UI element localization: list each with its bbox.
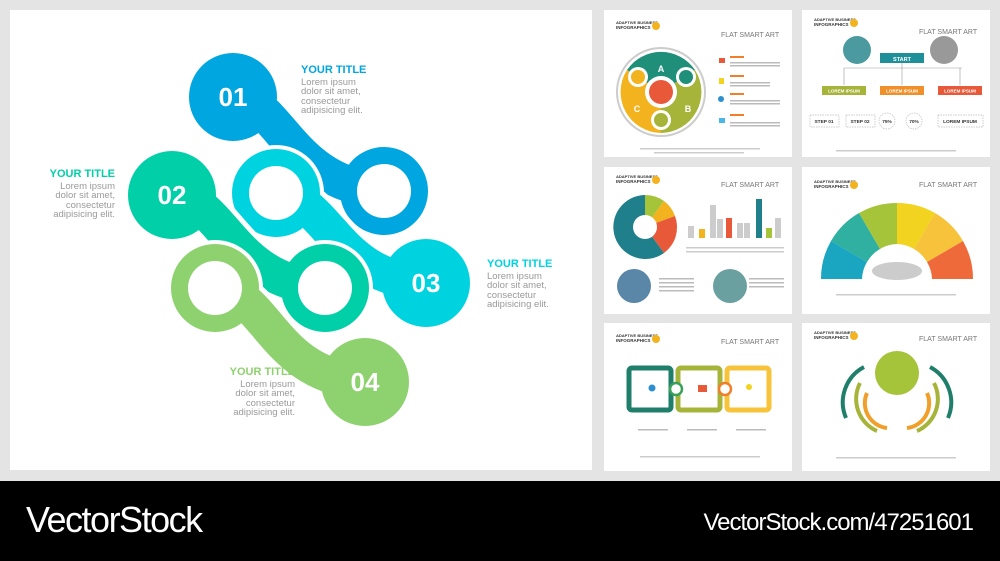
thumbnail 3: pie and bars: FLAT SMART ART xyxy=(721,182,780,189)
url text: VectorStock.com/47251601 xyxy=(703,509,973,536)
piece 02 teal xyxy=(124,147,373,336)
thumbnail 4: semicircle: INFOGRAPHICS xyxy=(814,184,849,189)
thumbnail 2: flowchart: ADAPTIVE BUSINESS xyxy=(814,17,856,22)
thumbnail 2: flowchart: STEP 01 xyxy=(814,119,834,125)
thumbnail 1: circle diagram: FLAT SMART ART xyxy=(721,32,780,39)
text 04: consectetur xyxy=(246,398,295,409)
text 01: consectetur xyxy=(301,96,350,107)
text 01: dolor sit amet, xyxy=(301,86,361,97)
text 03: dolor sit amet, xyxy=(487,280,547,291)
piece 02 teal: 02 xyxy=(158,180,186,210)
text 01: adipisicing elit. xyxy=(301,105,363,116)
text 01: Lorem ipsum xyxy=(301,77,356,88)
thumbnail 4: semicircle: FLAT SMART ART xyxy=(919,182,978,189)
thumbnail 2: flowchart: LOREM IPSUM xyxy=(943,119,977,125)
thumbnail 5: puzzle: ADAPTIVE BUSINESS xyxy=(616,333,658,338)
text 03 xyxy=(487,258,552,310)
thumbnail 5: puzzle: INFOGRAPHICS xyxy=(616,338,651,343)
thumbnail 1: circle diagram: A xyxy=(658,64,665,74)
thumbnail 4: semicircle xyxy=(802,167,990,314)
piece 01 blue xyxy=(185,49,432,239)
thumbnail 2: flowchart xyxy=(802,10,990,157)
thumbnail 5: puzzle xyxy=(604,323,792,471)
thumbnail 1: circle diagram: INFOGRAPHICS xyxy=(616,25,651,30)
thumbnail 2: flowchart: INFOGRAPHICS xyxy=(814,22,849,27)
piece 04 green: 04 xyxy=(351,367,380,397)
thumbnail 6: arcs: INFOGRAPHICS xyxy=(814,335,849,340)
thumbnail 2: flowchart: 70% xyxy=(909,119,920,125)
thumbnail 1: circle diagram: C xyxy=(634,104,641,114)
thumbnail 2: flowchart: FLAT SMART ART xyxy=(919,29,978,36)
thumbnail 6: arcs: ADAPTIVE BUSINESS xyxy=(814,330,856,335)
thumbnail 2: flowchart: START xyxy=(893,57,912,63)
thumbnail 2: flowchart: LOREM IPSUM xyxy=(886,88,918,94)
thumbnail 3: pie and bars: ADAPTIVE BUSINESS xyxy=(616,174,658,179)
brand logo text: VectorStock xyxy=(26,499,202,540)
piece 03 cyan xyxy=(228,145,474,331)
text 03: adipisicing elit. xyxy=(487,299,549,310)
thumbnail 3: pie and bars xyxy=(604,167,792,314)
thumbnail 2: flowchart: LOREM IPSUM xyxy=(828,88,860,94)
text 02: dolor sit amet, xyxy=(55,190,115,201)
text 02: adipisicing elit. xyxy=(53,209,115,220)
chain diagram xyxy=(128,53,470,426)
text 04: Lorem ipsum xyxy=(240,379,295,390)
text 02 xyxy=(50,168,115,220)
text 03: Lorem ipsum xyxy=(487,271,542,282)
thumbnail 1: circle diagram: B xyxy=(685,104,692,114)
text 03: YOUR TITLE xyxy=(487,258,552,270)
text 04 xyxy=(230,366,295,418)
thumbnail 2: flowchart: 75% xyxy=(882,119,893,125)
piece 03 cyan: 03 xyxy=(412,268,440,298)
piece 04 green xyxy=(167,240,409,426)
text 02: consectetur xyxy=(66,200,115,211)
text 04: adipisicing elit. xyxy=(233,407,295,418)
text 01: YOUR TITLE xyxy=(301,64,366,76)
thumbnail 2: flowchart: LOREM IPSUM xyxy=(944,88,976,94)
text 02: YOUR TITLE xyxy=(50,168,115,180)
thumbnail 6: arcs: FLAT SMART ART xyxy=(919,336,978,343)
thumbnail 1: circle diagram: ADAPTIVE BUSINESS xyxy=(616,20,658,25)
footer bar xyxy=(0,481,1000,561)
text 04: YOUR TITLE xyxy=(230,366,295,378)
thumbnail 6: arcs xyxy=(802,323,990,471)
text 02: Lorem ipsum xyxy=(60,181,115,192)
text 04: dolor sit amet, xyxy=(235,388,295,399)
thumbnail 5: puzzle: FLAT SMART ART xyxy=(721,339,780,346)
thumbnail 4: semicircle: ADAPTIVE BUSINESS xyxy=(814,179,856,184)
text 03: consectetur xyxy=(487,290,536,301)
main panel xyxy=(10,10,592,470)
piece 01 blue: 01 xyxy=(219,82,247,112)
thumbnail 3: pie and bars: INFOGRAPHICS xyxy=(616,179,651,184)
text 01 xyxy=(301,64,366,116)
thumbnail 1: circle diagram xyxy=(604,10,792,157)
thumbnail 2: flowchart: STEP 02 xyxy=(850,119,870,125)
